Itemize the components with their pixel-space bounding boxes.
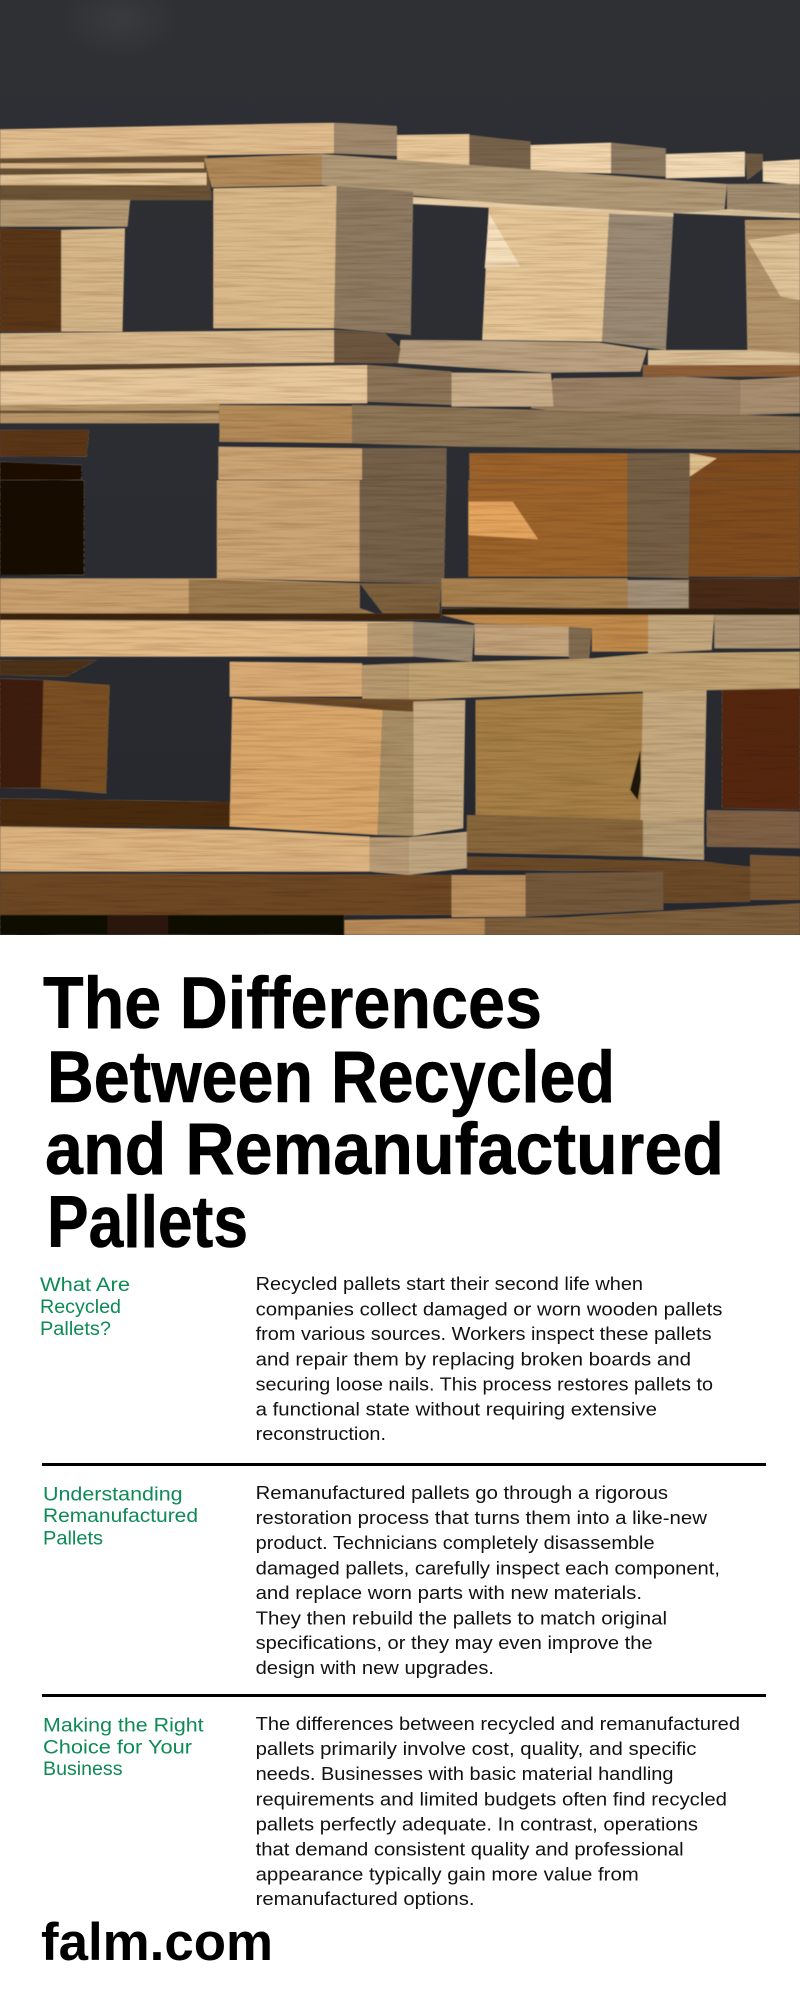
lower half of pallets — [0, 480, 800, 935]
title — [43, 963, 724, 1263]
text block: making the right choice description: pallets perfectly adequate. In contrast, operations — [256, 1814, 698, 1834]
upper half of pallets — [0, 123, 800, 480]
title: Between Recycled — [47, 1037, 615, 1118]
text block: remanufactured pallets description: design with new upgrades. — [256, 1657, 494, 1678]
text block: recycled pallets description: securing loose nails. This process restores pallets to — [256, 1374, 713, 1395]
heading: what are recycled pallets: Recycled — [40, 1297, 121, 1318]
text block: remanufactured pallets description: product. Technicians completely disassemble — [256, 1532, 655, 1553]
section: understanding remanufactured pallets — [43, 1482, 720, 1678]
text block: recycled pallets description — [256, 1273, 722, 1444]
title: Pallets — [47, 1182, 248, 1263]
text block: making the right choice description — [256, 1713, 740, 1909]
text block: recycled pallets description: reconstruction. — [256, 1423, 386, 1444]
heading: making the right choice for your business: Making the Right — [43, 1715, 204, 1736]
text block: remanufactured pallets description: damaged pallets, carefully inspect each component, — [256, 1557, 720, 1578]
logo: falm.com: falm.com — [41, 1913, 273, 1972]
heading: what are recycled pallets: What Are — [40, 1275, 130, 1296]
photo: stacked wooden pallets — [0, 0, 800, 935]
text block: making the right choice description: pallets primarily involve cost, quality, and specific — [256, 1738, 696, 1759]
heading: understanding remanufactured pallets: Understanding — [43, 1485, 183, 1506]
text block: recycled pallets description: companies collect damaged or worn wooden pallets — [256, 1298, 722, 1319]
heading: making the right choice for your business — [43, 1715, 204, 1780]
text block: remanufactured pallets description — [256, 1482, 720, 1678]
text block: making the right choice description: that demand consistent quality and professional — [256, 1838, 684, 1859]
title: and Remanufactured — [45, 1109, 724, 1190]
heading: what are recycled pallets — [40, 1275, 130, 1340]
text block: recycled pallets description: a functional state without requiring extensive — [256, 1398, 657, 1419]
text block: making the right choice description: remanufactured options. — [256, 1888, 474, 1909]
text block: making the right choice description: needs. Businesses with basic material handling — [256, 1763, 674, 1784]
section: making the right choice — [43, 1713, 740, 1909]
text block: recycled pallets description: and repair them by replacing broken boards and — [256, 1348, 691, 1369]
title: The Differences — [43, 963, 542, 1044]
heading: making the right choice for your business: Business — [43, 1759, 122, 1780]
text block: recycled pallets description: Recycled pallets start their second life when — [256, 1273, 643, 1294]
heading: understanding remanufactured pallets: Pallets — [43, 1528, 103, 1549]
section: what are recycled pallets — [40, 1273, 722, 1444]
text block: remanufactured pallets description: They then rebuild the pallets to match original — [256, 1607, 667, 1628]
text block: remanufactured pallets description: Remanufactured pallets go through a rigorous — [256, 1482, 668, 1503]
heading: understanding remanufactured pallets: Remanufactured — [43, 1506, 198, 1527]
heading: understanding remanufactured pallets — [43, 1485, 198, 1549]
text block: making the right choice description: requirements and limited budgets often find recycled — [256, 1788, 727, 1809]
text block: remanufactured pallets description: restoration process that turns them into a like-new — [256, 1507, 708, 1528]
text block: remanufactured pallets description: and replace worn parts with new materials. — [256, 1582, 642, 1603]
text block: remanufactured pallets description: specifications, or they may even improve the — [256, 1632, 653, 1653]
text block: making the right choice description: The differences between recycled and remanufactured — [256, 1713, 740, 1734]
heading: making the right choice for your business: Choice for Your — [43, 1737, 193, 1758]
heading: what are recycled pallets: Pallets? — [40, 1319, 111, 1340]
text block: recycled pallets description: from various sources. Workers inspect these pallets — [256, 1323, 712, 1344]
text block: making the right choice description: appearance typically gain more value from — [256, 1864, 639, 1884]
